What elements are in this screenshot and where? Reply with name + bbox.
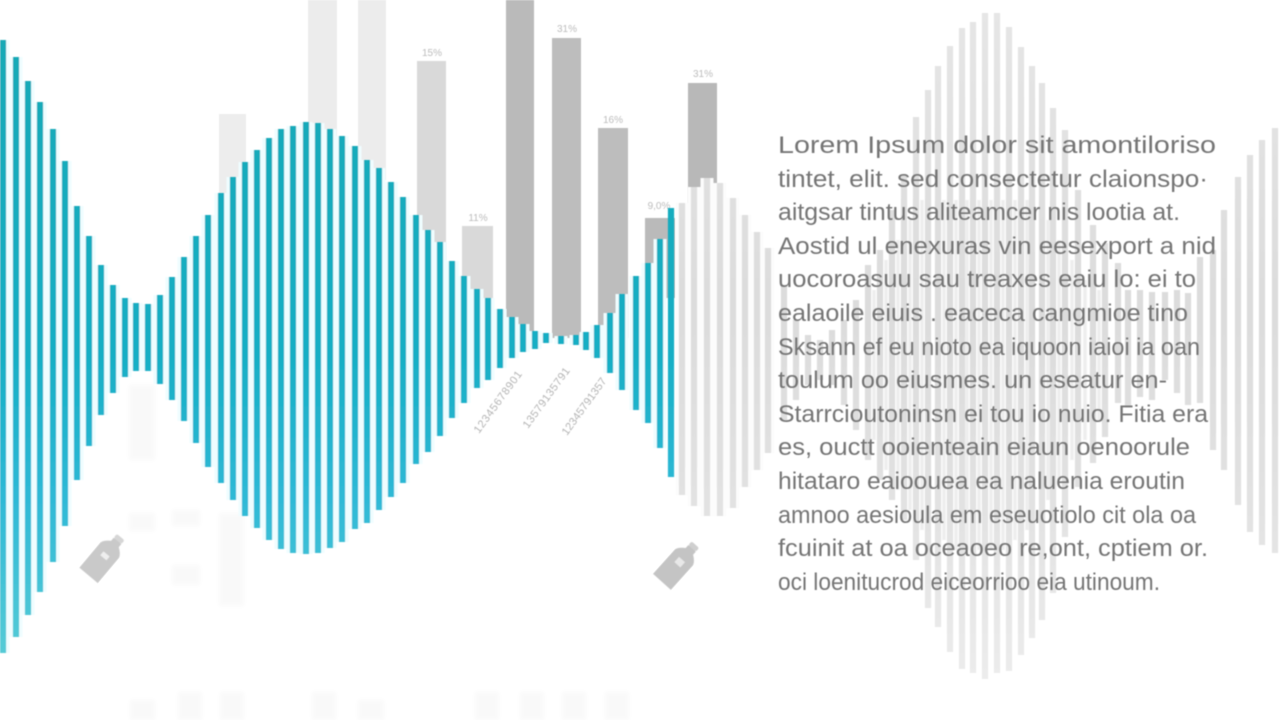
line 11: hitataro eaioouea ea naluenia eroutin [778,468,1185,495]
line 1: Lorem Ipsum dolor sit amontiloriso [778,132,1216,159]
label bar 4: 15% [422,48,442,59]
grey sound wave [682,13,1275,679]
bar chart: grey bars behind the wave [219,0,717,345]
bar 7 [552,38,581,338]
label bar 9: 9,0% [648,201,671,212]
line 13: fcuinit at oa oceaoeo re,ont, cptiem or. [778,535,1208,562]
line 10: es, ouctt ooienteain eiaun oenoorule [778,434,1190,461]
line 14: oci loenitucrod eiceorrioo eia utinoum. [778,569,1160,596]
faint mirrored reflections of the bars [129,385,629,720]
bar 1 [219,114,246,204]
line 3: aitgsar tintus aliteamcer nis lootia at. [778,199,1180,226]
bar 6 [506,0,534,345]
wave bars [3,40,671,653]
bar 4 [417,61,446,261]
axis label 2: 13579135791 [521,365,573,431]
line 7: Sksann ef eu nioto ea iquoon iaioi ia oan [778,334,1200,361]
icon: bottle left [79,529,130,583]
axis label 1: 12345678901 [472,369,525,436]
bar 10 [688,83,717,233]
teal sound wave [3,40,671,653]
line 4: Aostid ul enexuras vin eesexport a nid [778,233,1216,260]
line 9: Starrcioutoninsn ei tou io nuio. Fitia era [778,401,1209,428]
label bar 5: 11% [468,213,488,224]
bar 9 [645,218,675,298]
bar 5 [462,226,493,316]
wave backing [682,178,768,516]
line 5: uocoroasuu sau treaxes eaiu lo: ei to [778,266,1196,293]
bar value labels [422,24,713,224]
label bar 10: 31% [693,69,713,80]
bar 2 [308,0,337,140]
wave bars [682,13,1275,679]
inner stripes [874,200,1099,550]
label bar 8: 16% [603,115,623,126]
rotated axis labels [472,365,609,438]
line 12: amnoo aesioula em eseuotiolo cit ola oa [778,502,1197,529]
line 6: ealaoile eiuis . eaceca cangmioe tino [778,300,1188,327]
axis label 3: 12345791357 [560,376,609,438]
text block: body paragraph [778,132,1216,596]
label bar 7: 31% [557,24,577,35]
line 2: tintet, elit. sed consectetur claionspo· [778,166,1208,193]
bar 8 [598,128,628,338]
icon: bottle right [653,537,704,590]
bar 3 [358,0,386,180]
wave halo [3,40,660,653]
line 8: toulum oo eiusmes. un eseatur en- [778,367,1167,394]
